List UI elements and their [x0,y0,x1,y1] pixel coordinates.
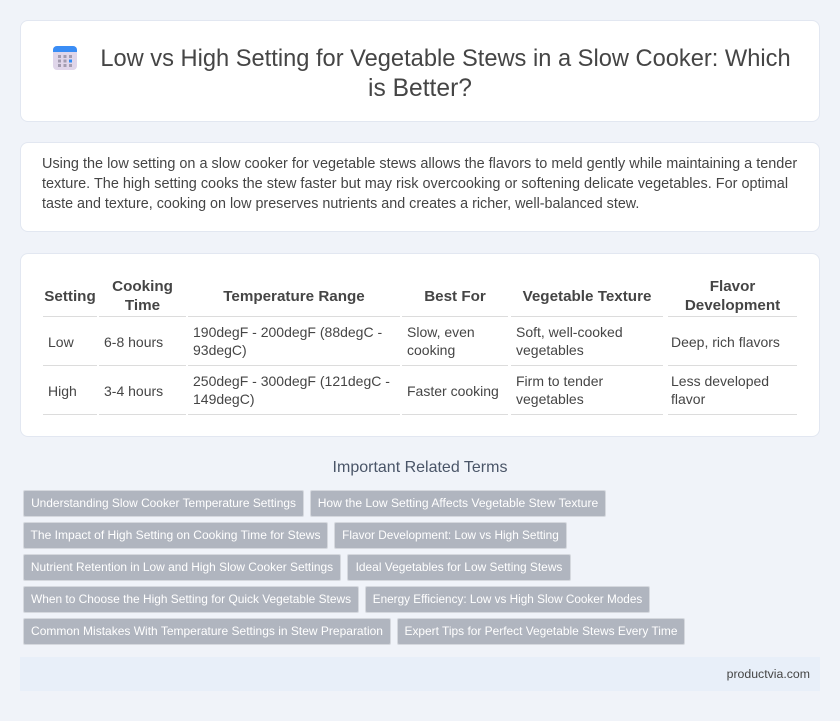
footer source text: productvia.com [727,667,810,681]
footer bar [20,657,820,691]
table: 93degC) [193,342,247,358]
table: Development [685,297,780,314]
table [43,278,797,415]
icon: calendar [53,46,77,70]
related term tags: Ideal Vegetables for Low Setting Stews [356,560,562,574]
table: Best For [424,288,486,305]
table: Setting [44,288,96,305]
table: Deep, rich flavors [671,334,780,350]
table: Cooking [112,278,173,295]
intro text [42,156,797,212]
intro text: texture. The high setting cooks the stew faster but may risk overcooking or softening delicate vegetables. For optimal [42,176,788,192]
intro panel [20,142,820,232]
table: Soft, well-cooked [516,324,623,340]
related term tags: When to Choose the High Setting for Quick Vegetable Stews [31,592,351,606]
table: Temperature Range [223,288,365,305]
related terms heading: Important Related Terms [333,459,507,476]
table: vegetables [516,391,584,407]
table: Less developed [671,373,769,389]
related term tags: Energy Efficiency: Low vs High Slow Cooker Modes [373,593,642,606]
table: 190degF - 200degF (88degC - [193,324,382,340]
table: Slow, even [407,324,475,340]
related term tags: The Impact of High Setting on Cooking Time for Stews [31,528,320,542]
comparison table panel [20,253,820,437]
related term tags [23,490,685,645]
table: High [48,383,77,399]
table: 250degF - 300degF (121degC - [193,373,390,389]
title: Low vs High Setting for Vegetable Stews in a Slow Cooker: Which [100,46,791,72]
table: 3-4 hours [104,383,163,399]
title: is Better? [368,75,472,102]
header panel [20,20,820,122]
title [100,46,791,102]
related term tags: Flavor Development: Low vs High Setting [342,528,559,542]
table: 149degC) [193,391,254,407]
related term tags: Nutrient Retention in Low and High Slow Cooker Settings [31,560,333,574]
table: Low [48,334,74,350]
table: cooking [407,342,455,358]
table: Faster cooking [407,383,499,399]
related term tags: Expert Tips for Perfect Vegetable Stews Every Time [404,624,678,638]
table: Time [125,297,160,314]
related term tags: Understanding Slow Cooker Temperature Settings [31,496,296,510]
intro text: Using the low setting on a slow cooker for vegetable stews allows the flavors to meld gently while maintaining a tender [42,156,797,172]
table: Firm to tender [516,373,603,389]
related term tags: Common Mistakes With Temperature Settings in Stew Preparation [31,624,383,638]
related term tags: How the Low Setting Affects Vegetable Stew Texture [318,496,598,510]
table: vegetables [516,342,584,358]
table: 6-8 hours [104,334,163,350]
table: Vegetable Texture [523,288,651,305]
intro text: taste and texture, cooking on low preserves nutrients and creates a richer, well-balanced stew. [42,196,639,212]
table: Flavor [710,278,755,295]
table: flavor [671,391,705,407]
